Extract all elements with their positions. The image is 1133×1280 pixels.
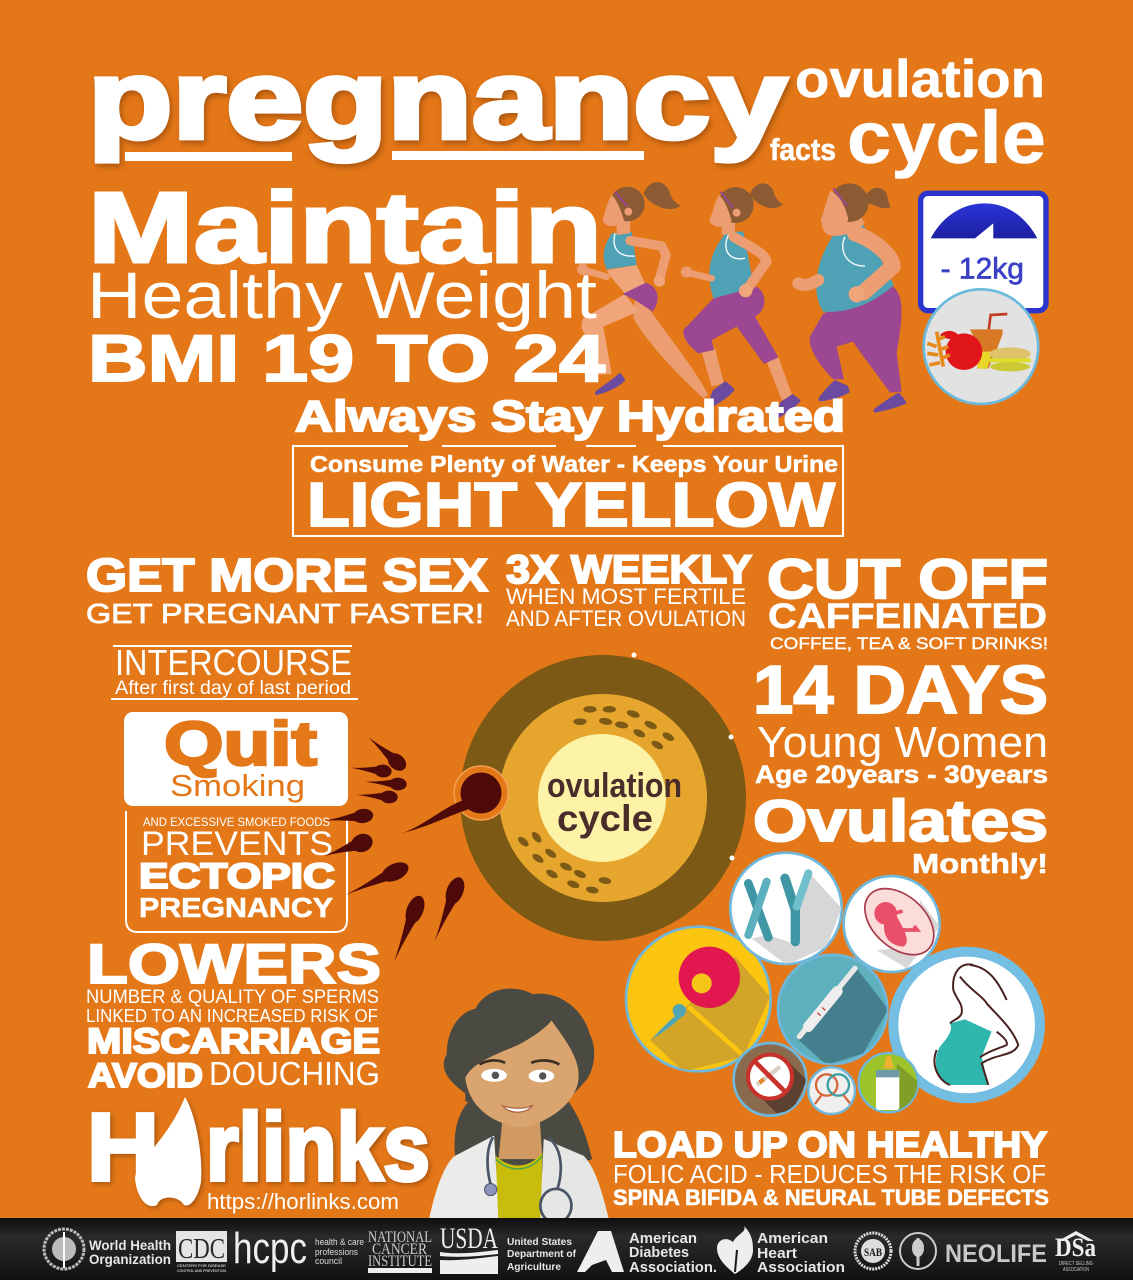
logo letters rlinks: rlinks	[206, 1094, 430, 1201]
logo: American Diabetes Association: American	[629, 1230, 697, 1247]
heading: 3X WEEKLY: 3X WEEKLY	[506, 548, 752, 592]
text: INTERCOURSE: INTERCOURSE	[115, 642, 352, 683]
heading: cycle: cycle	[847, 96, 1046, 179]
logo: American Diabetes Association	[577, 1230, 717, 1276]
text: smoked foods: AND EXCESSIVE SMOKED FOODS	[143, 815, 330, 829]
text: PREVENTS: PREVENTS	[141, 825, 333, 863]
footer logo bar	[0, 1218, 1133, 1280]
logo: American Diabetes Association: Association.	[629, 1259, 717, 1276]
hydration box outline	[293, 446, 843, 536]
logo: National Cancer Institute: CANCER	[372, 1241, 427, 1258]
text: get pregnant faster: GET PREGNANT FASTER!	[86, 598, 484, 629]
text: folic acid: FOLIC ACID - REDUCES THE RISK OF	[613, 1159, 1046, 1189]
panel: prevents ectopic pregnancy	[126, 811, 347, 932]
text: LIGHT YELLOW: LIGHT YELLOW	[307, 471, 836, 540]
heading: LOWERS: LOWERS	[87, 932, 381, 995]
icon: pregnancy test	[778, 955, 888, 1065]
gauge value: - 12kg	[941, 253, 1024, 286]
heading: GET MORE SEX: GET MORE SEX	[86, 549, 488, 601]
text: Monthly: Monthly!	[912, 848, 1048, 879]
logo: DSA: DIRECT SELLING	[1059, 1261, 1093, 1267]
runner slim	[577, 182, 733, 405]
logo: WHO: Organization	[89, 1251, 171, 1267]
logo: CDC: CONTROL AND PREVENTION	[177, 1269, 226, 1273]
title block	[88, 36, 1046, 179]
logo: CDC	[176, 1231, 227, 1273]
icon: no smoking	[734, 1043, 807, 1116]
heading: Ovulates: Ovulates	[753, 789, 1048, 854]
heading: facts: facts	[770, 132, 836, 167]
logo drop mark	[135, 1097, 201, 1206]
heading: pregnancy: pregnancy	[88, 36, 787, 162]
icon cluster: pregnancy circles	[626, 853, 1040, 1116]
section: get more sex	[86, 549, 488, 629]
logo: DSA: DSa	[1055, 1233, 1096, 1262]
text: ECTOPIC: ECTOPIC	[139, 857, 335, 896]
heading: CUT OFF: CUT OFF	[767, 547, 1048, 610]
logo: wheat	[900, 1233, 936, 1269]
panel: quit smoking	[124, 710, 348, 806]
text: consume water: Consume Plenty of Water - Keeps Your Urine	[310, 451, 838, 477]
logo: American Heart Association: Association	[757, 1259, 845, 1276]
icon: XY chromosomes	[730, 853, 842, 965]
section: 3x weekly	[506, 548, 752, 631]
logo letter H: H	[87, 1094, 159, 1201]
logo: USDA: USDA	[440, 1222, 498, 1255]
heading: ovulation: ovulation	[795, 50, 1045, 109]
icon: food circle	[924, 289, 1038, 404]
logo: American Diabetes Association: Diabetes	[629, 1244, 689, 1261]
text: Smoking: Smoking	[170, 768, 305, 803]
heading: MISCARRIAGE: MISCARRIAGE	[87, 1022, 380, 1061]
heading: 14 DAYS: 14 DAYS	[753, 652, 1048, 728]
section: hydration	[293, 392, 845, 540]
section: lowers sperm quality	[86, 932, 381, 1095]
icon: embryo	[844, 876, 946, 972]
runner overweight	[798, 183, 905, 411]
section: 14 days	[753, 652, 1048, 879]
logo: American Heart Association	[717, 1226, 845, 1276]
text: PREGNANCY: PREGNANCY	[139, 892, 333, 923]
diagram: ovulation cycle egg	[460, 652, 746, 941]
section: folic acid	[613, 1124, 1049, 1210]
logo: hcpc: health & care	[315, 1237, 364, 1247]
text: linked to risk: LINKED TO AN INCREASED RISK OF	[86, 1006, 378, 1026]
logo: American Heart Association: Heart	[757, 1245, 797, 1262]
illustration: doctor	[428, 989, 610, 1223]
text: DOUCHING: DOUCHING	[209, 1055, 380, 1092]
logo: hcpc: council	[315, 1256, 342, 1266]
heading: Quit: Quit	[164, 710, 317, 779]
heading: load up on healthy: LOAD UP ON HEALTHY	[613, 1124, 1047, 1165]
logo: DSA	[1055, 1231, 1096, 1273]
logo: Horlinks	[87, 1094, 430, 1206]
section: cut off caffeine	[767, 547, 1048, 653]
section: intercourse timing	[111, 642, 358, 700]
logo: hcpc: hcpc	[233, 1224, 307, 1273]
icon: egg and sperm	[626, 927, 771, 1072]
text: number and quality: NUMBER & QUALITY OF SPERMS	[86, 987, 379, 1008]
title underline right	[392, 151, 644, 160]
text: Healthy Weight: Healthy Weight	[87, 258, 597, 332]
logo: NeoLife: NEOLIFE	[945, 1240, 1047, 1268]
text: coffee tea soft drinks: COFFEE, TEA & SOFT DRINKS!	[770, 634, 1048, 653]
text: Young Women: Young Women	[757, 718, 1048, 767]
logo: CDC: CENTERS FOR DISEASE	[177, 1264, 227, 1268]
logo: SAB	[855, 1233, 891, 1269]
icon: baby bottle	[859, 1053, 920, 1113]
logo: USDA	[440, 1222, 577, 1274]
title underline left	[125, 152, 292, 161]
text: CAFFEINATED: CAFFEINATED	[768, 597, 1047, 636]
heading: Always Stay Hydrated: Always Stay Hydrated	[295, 392, 845, 441]
logo: National Cancer Institute	[368, 1229, 432, 1273]
runner medium	[681, 183, 799, 416]
diagram label: ovulation: ovulation	[547, 767, 682, 805]
follicle dots	[516, 706, 675, 894]
logo: USDA: Agriculture	[507, 1262, 561, 1273]
text: after first day: After first day of last period	[115, 678, 351, 699]
logo: American Heart Association: American	[757, 1230, 828, 1247]
text: age range: Age 20years - 30years	[755, 761, 1048, 789]
logo: hcpc: professions	[315, 1247, 358, 1257]
diagram label: cycle: cycle	[557, 798, 653, 839]
heading: Maintain: Maintain	[88, 172, 602, 284]
logo: CDC: CDC	[178, 1233, 225, 1265]
logo: National Cancer Institute: INSTITUTE	[368, 1253, 432, 1270]
illustration: sperm cells	[321, 731, 508, 965]
text: and after ovulation: AND AFTER OVULATION	[506, 606, 746, 631]
logo: WHO: World Health	[89, 1237, 171, 1253]
icon: fertility symbols	[808, 1067, 855, 1114]
icon: weight gain gauge	[921, 193, 1046, 311]
text: BMI range: BMI 19 TO 24	[88, 321, 605, 395]
text: AVOID: AVOID	[88, 1057, 203, 1095]
text: when most fertile: WHEN MOST FERTILE	[506, 584, 746, 609]
logo: DSA: ASSOCIATION	[1063, 1267, 1089, 1273]
text: spina bifida: SPINA BIFIDA & NEURAL TUBE DEFECTS	[613, 1185, 1049, 1210]
illustration: three runners	[577, 182, 905, 416]
logo: National Cancer Institute: NATIONAL	[368, 1229, 432, 1246]
logo: USDA: United States	[507, 1237, 572, 1248]
logo: WHO	[44, 1229, 171, 1269]
logo: USDA: Department of	[507, 1249, 577, 1260]
text: website url: https://horlinks.com	[207, 1189, 399, 1214]
icon: pregnant woman	[893, 952, 1040, 1098]
section: maintain healthy weight	[87, 172, 605, 395]
logo: SAB: SAB	[864, 1245, 882, 1259]
